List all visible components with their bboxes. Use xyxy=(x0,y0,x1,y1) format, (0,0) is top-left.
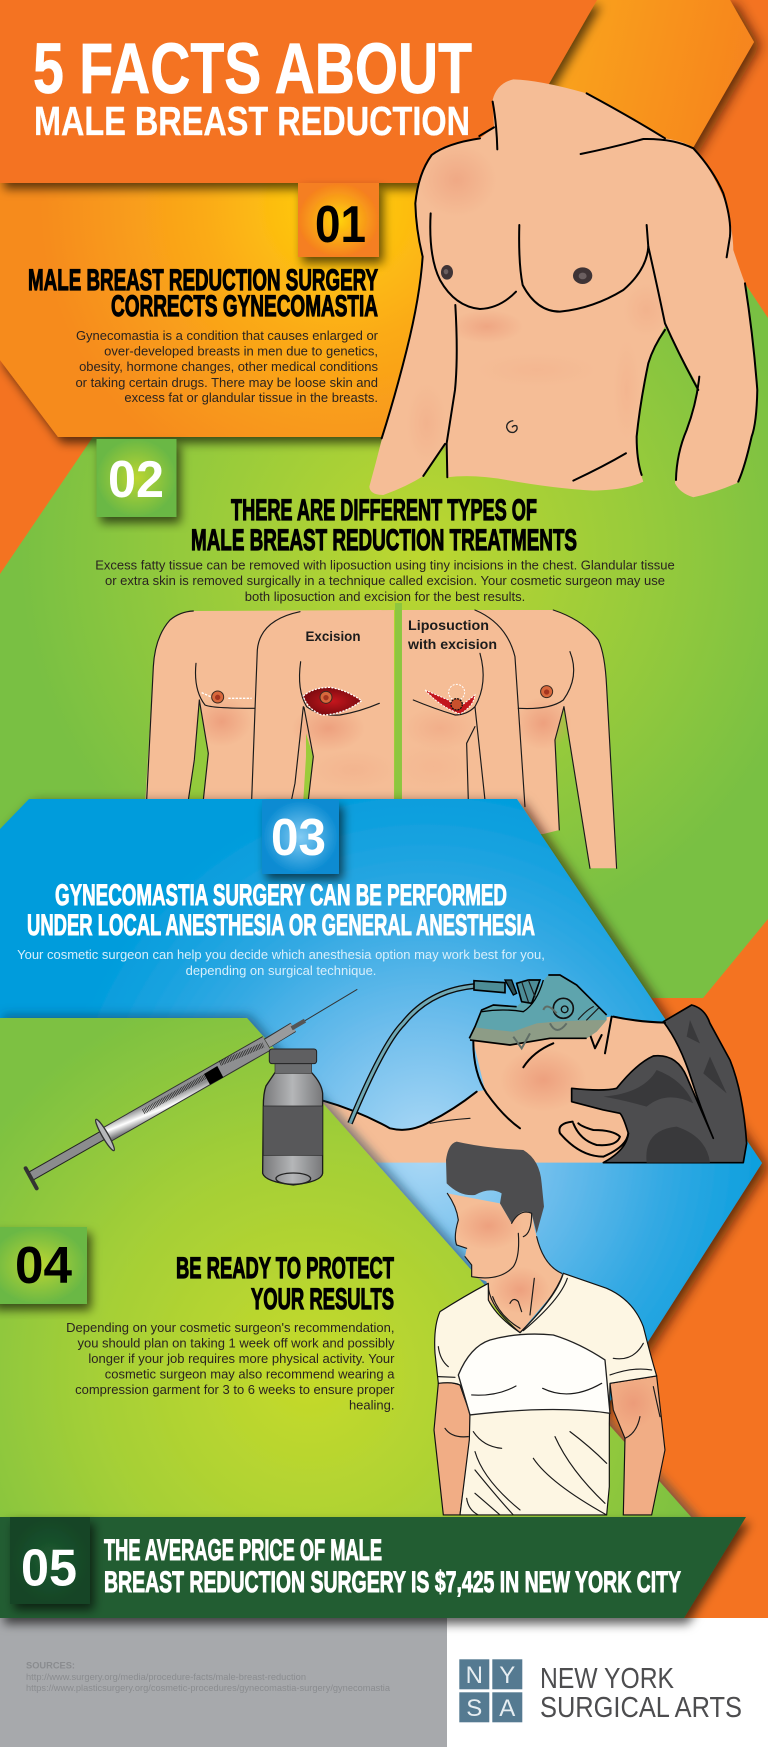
footer: logo panel: S xyxy=(466,1695,482,1722)
footer: logo panel: SURGICAL ARTS xyxy=(540,1692,742,1724)
upper green section background xyxy=(0,155,768,1050)
panel: fact 01 background xyxy=(0,183,470,437)
panel: fact 03 blue hexagon xyxy=(0,799,762,1417)
illustration: excision and liposuction torsos: Excision xyxy=(306,628,360,644)
title: 5 FACTS ABOUT xyxy=(33,30,472,109)
footer: sources panel: SOURCES: xyxy=(26,1660,75,1672)
number badge 03: 03 xyxy=(271,809,326,867)
number badge 04 xyxy=(0,1227,87,1304)
text: fact 01 body: obesity, hormone changes, other medical conditions xyxy=(79,359,378,374)
text: fact 03 body: depending on surgical technique. xyxy=(186,963,376,978)
illustration: excision and liposuction torsos: Liposuction xyxy=(408,617,489,633)
number badge 03 xyxy=(262,800,339,874)
heading: fact 05 xyxy=(104,1534,681,1599)
illustration: patient under anesthesia xyxy=(290,975,747,1163)
icon: medicine vial xyxy=(263,1049,323,1185)
text: fact 01 body: over-developed breasts in men due to genetics, xyxy=(104,344,378,358)
heading: fact 01 xyxy=(28,264,378,323)
text: fact 02 body: both liposuction and excision for the best results. xyxy=(245,589,525,604)
title xyxy=(33,30,472,144)
text: fact 04 body: healing. xyxy=(349,1398,394,1412)
heading: fact 01: CORRECTS GYNECOMASTIA xyxy=(111,290,378,323)
footer: logo panel: NEW YORK xyxy=(540,1663,675,1695)
text: fact 04 body: cosmetic surgeon may also recommend wearing a xyxy=(105,1366,395,1382)
text: fact 01 body: or taking certain drugs. There may be loose skin and xyxy=(75,375,378,390)
footer: logo panel xyxy=(447,1618,768,1747)
illustration: excision and liposuction torsos: with excision xyxy=(407,636,497,652)
heading: fact 02: THERE ARE DIFFERENT TYPES OF xyxy=(231,494,537,527)
heading: fact 01: MALE BREAST REDUCTION SURGERY xyxy=(28,264,378,297)
illustration: man wearing compression garment xyxy=(434,1142,665,1515)
number badge 05: 05 xyxy=(21,1540,77,1598)
footer: logo panel: N xyxy=(466,1662,483,1689)
heading: fact 03 xyxy=(27,879,535,942)
text: fact 04 body: longer if your job requires more physical activity. Your xyxy=(88,1351,395,1366)
heading: fact 02 xyxy=(191,494,577,557)
text: fact 04 body: compression garment for 3 to 6 weeks to ensure proper xyxy=(75,1382,395,1397)
heading: fact 04 xyxy=(176,1252,394,1316)
number badge 02: 02 xyxy=(108,451,164,509)
oxygen tube xyxy=(350,980,540,1123)
text: fact 02 body: or extra skin is removed surgically in a technique called excision. Your cosmetic surgeon may use xyxy=(105,573,665,588)
footer: sources panel xyxy=(0,1618,447,1747)
anesthesia mask xyxy=(469,975,607,1048)
panel: title banner xyxy=(0,0,597,183)
text: fact 01 body xyxy=(75,328,379,405)
illustration: male torso xyxy=(369,79,757,497)
footer: sources panel: https://www.plasticsurgery.org/cosmetic-procedures/gynecomastia-surgery/gynecomastia xyxy=(26,1683,391,1694)
text: fact 02 body xyxy=(95,558,675,604)
number badge 05 xyxy=(10,1517,90,1604)
lower green section background xyxy=(0,1018,700,1527)
heading: fact 03: GYNECOMASTIA SURGERY CAN BE PERFORMED xyxy=(55,879,507,912)
text: fact 04 body xyxy=(66,1320,395,1412)
footer: logo panel: A xyxy=(499,1695,515,1722)
icon: syringe xyxy=(26,989,357,1188)
number badge 02 xyxy=(96,439,176,517)
text: fact 04 body: you should plan on taking 1 week off work and possibly xyxy=(77,1336,395,1350)
yellow hexagon behind title xyxy=(480,0,754,165)
heading: fact 04: BE READY TO PROTECT xyxy=(176,1252,394,1285)
text: fact 01 body: excess fat or glandular tissue in the breasts. xyxy=(124,390,378,405)
text: fact 01 body: Gynecomastia is a condition that causes enlarged or xyxy=(76,328,379,343)
panel: fact 05 price band xyxy=(0,1517,746,1618)
illustration: excision and liposuction torsos xyxy=(145,603,617,868)
text: fact 02 body: Excess fatty tissue can be removed with liposuction using tiny incisions in the chest. Glandular tissue xyxy=(95,558,675,572)
text: fact 04 body: Depending on your cosmetic surgeon's recommendation, xyxy=(66,1320,394,1335)
heading: fact 04: YOUR RESULTS xyxy=(251,1283,394,1316)
text: fact 03 body xyxy=(17,947,545,978)
text: fact 03 body: Your cosmetic surgeon can help you decide which anesthesia option may work best for you, xyxy=(17,947,545,962)
title: MALE BREAST REDUCTION xyxy=(34,98,470,144)
heading: fact 05: THE AVERAGE PRICE OF MALE xyxy=(104,1534,382,1567)
number badge 01: 01 xyxy=(315,196,366,254)
number badge 01 xyxy=(298,183,379,257)
number badge 04: 04 xyxy=(15,1237,72,1295)
footer: logo panel: Y xyxy=(499,1662,515,1689)
footer: sources panel: http://www.surgery.org/media/procedure-facts/male-breast-reduction xyxy=(26,1672,306,1683)
